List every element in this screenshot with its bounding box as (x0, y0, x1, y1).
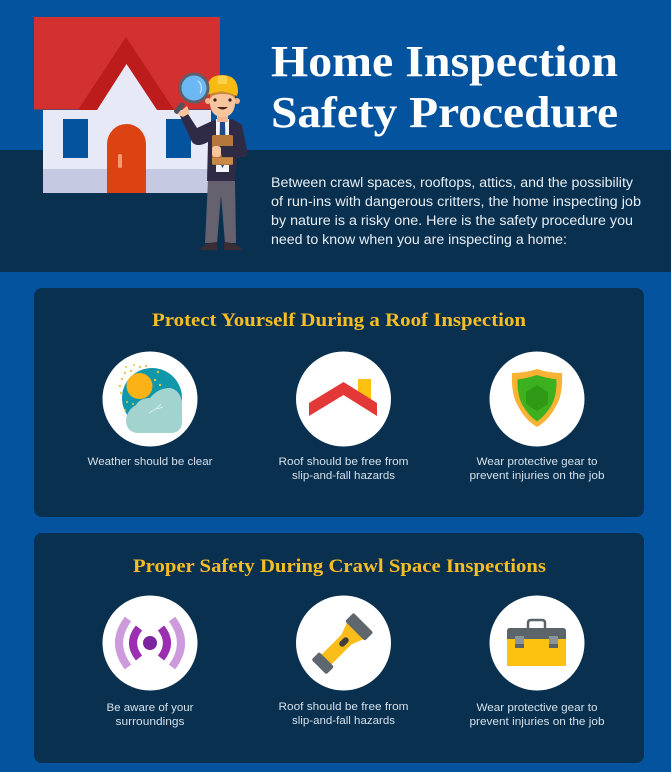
illustration: inspector with magnifying glass (173, 74, 248, 250)
panel: roof inspection (34, 288, 644, 517)
caption: shield: prevent injuries on the job (470, 470, 604, 482)
item: clear weather (102, 352, 198, 446)
caption: shield: Wear protective gear to (476, 456, 598, 468)
item: shield (490, 352, 584, 446)
caption: flashlight (278, 701, 408, 727)
caption: roof: slip-and-fall hazards (292, 470, 396, 482)
caption: toolbox: Wear protective gear to (476, 702, 598, 714)
caption: flashlight: Roof should be free from (278, 701, 408, 713)
item: toolbox (490, 596, 584, 690)
caption: shield (470, 456, 604, 482)
caption: flashlight: slip-and-fall hazards (292, 715, 396, 727)
caption: toolbox (470, 702, 604, 728)
title (271, 37, 618, 137)
item: roof (296, 352, 391, 446)
heading: crawl space: Proper Safety During Crawl Space Inspections (133, 557, 546, 577)
caption: surroundings (106, 702, 194, 728)
header dark band (0, 150, 671, 272)
intro text: by nature is a risky one. Here is the safety procedure you (271, 213, 633, 228)
intro text (271, 175, 641, 247)
title: Safety Procedure (271, 88, 618, 137)
intro text: need to know when you are inspecting a home: (271, 232, 567, 247)
caption: clear weather: Weather should be clear (88, 456, 213, 468)
caption: toolbox: prevent injuries on the job (470, 716, 604, 728)
title: Home Inspection (271, 37, 618, 86)
intro text: of run-ins with dangerous critters, the home inspecting job (271, 194, 641, 209)
illustration: house (34, 17, 220, 193)
caption: surroundings: surroundings (116, 716, 185, 728)
caption: surroundings: Be aware of your (106, 702, 194, 714)
heading: roof inspection: Protect Yourself During a Roof Inspection (152, 311, 527, 331)
intro text: Between crawl spaces, rooftops, attics, and the possibility (271, 175, 633, 190)
panel: crawl space (34, 533, 644, 763)
item: flashlight (296, 596, 391, 690)
caption: roof: Roof should be free from (278, 456, 408, 468)
item: surroundings signal (102, 596, 198, 690)
caption: roof (278, 456, 408, 482)
